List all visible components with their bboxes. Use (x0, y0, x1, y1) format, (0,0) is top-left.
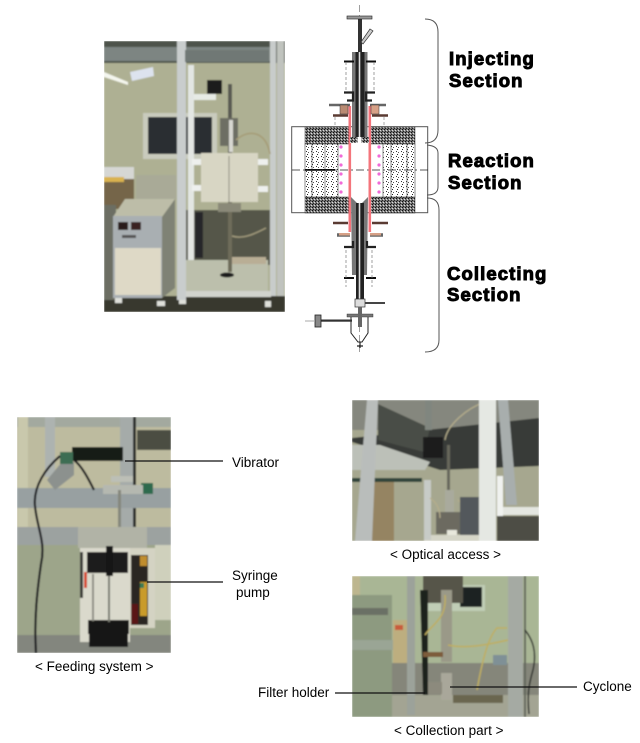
leader line: vibrator (125, 460, 223, 462)
heading: reaction section: Section (448, 172, 523, 193)
leader line: filter holder (335, 692, 425, 694)
leader line: cyclone (450, 686, 577, 688)
leader line: syringe pump (147, 581, 223, 583)
porous insulation (305, 144, 338, 197)
cyclone assembly (355, 299, 365, 307)
photo: feeding system (17, 417, 171, 653)
photo: full reactor apparatus (104, 41, 285, 312)
insulation bands (305, 127, 350, 144)
heater dots (339, 145, 381, 194)
lower body (351, 197, 357, 275)
label: vibrator: Vibrator (232, 455, 280, 470)
label: cyclone: Cyclone (583, 679, 632, 694)
heading: reaction section: Reaction (448, 150, 535, 171)
lower flanges (333, 222, 388, 224)
reactor cross-section diagram (292, 5, 428, 352)
bracket: collecting section (425, 198, 439, 352)
heading: injecting section: Injecting (449, 48, 535, 69)
upper flanges (344, 60, 376, 62)
bracket: reaction section (427, 145, 438, 195)
heading: injecting section: Section (449, 70, 524, 91)
caption: collection part: < Collection part > (394, 723, 504, 738)
caption: optical access: < Optical access > (390, 547, 501, 562)
reactor tube walls (348, 106, 351, 232)
photo: optical access (352, 400, 539, 541)
furnace outline (292, 127, 428, 213)
photo: collection part (352, 576, 539, 717)
bracket: injecting section (425, 19, 438, 143)
heading: collecting section: Section (447, 284, 522, 305)
injector (358, 17, 362, 53)
heading: collecting section: Collecting (447, 263, 547, 284)
label: syringe pump: pump (236, 585, 270, 600)
label: filter holder: Filter holder (258, 685, 330, 700)
centre axis (358, 5, 360, 352)
caption: feeding system: < Feeding system > (35, 659, 154, 674)
label: syringe pump: Syringe (232, 568, 278, 583)
